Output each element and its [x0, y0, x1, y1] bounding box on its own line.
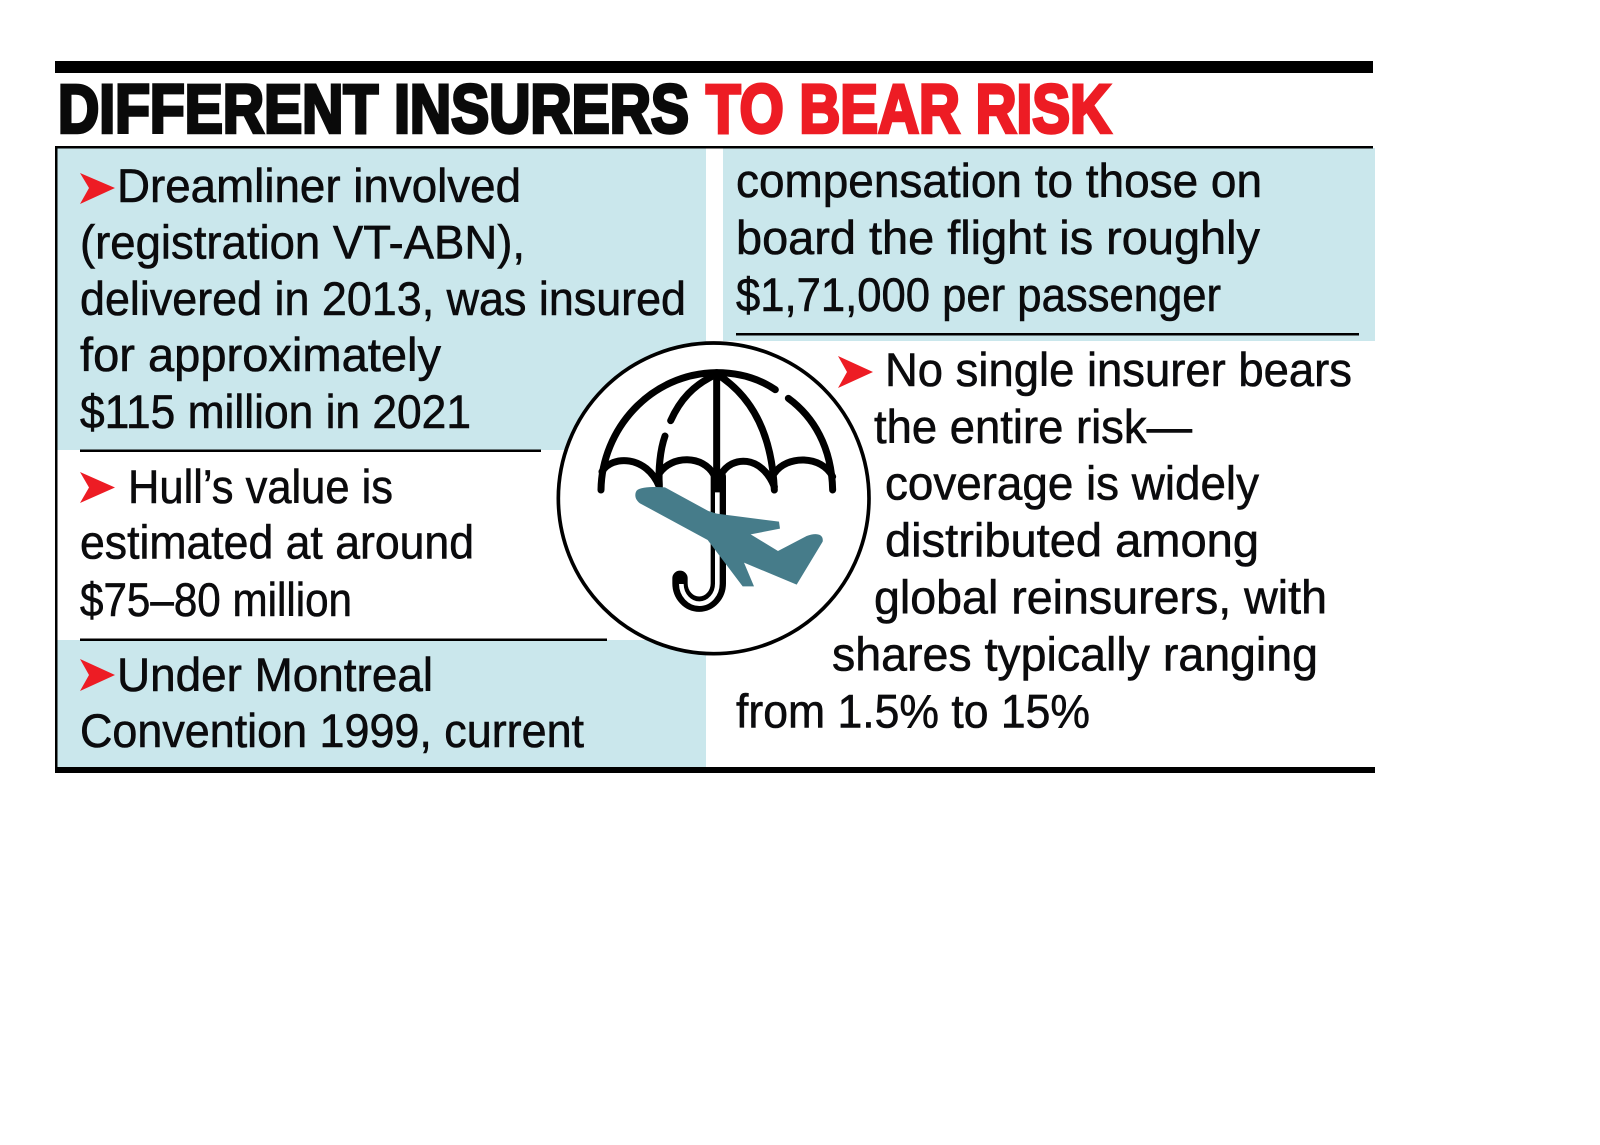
background: montreal block	[57, 640, 706, 768]
text block: dreamliner insured value: $115 million in 2021	[80, 386, 471, 439]
text block: montreal convention: Under Montreal	[117, 649, 433, 702]
title: TO BEAR RISK	[706, 70, 1111, 148]
text block: hull value: $75–80 million	[80, 574, 352, 627]
icon circle	[558, 343, 869, 654]
text block: reinsurers share: coverage is widely	[885, 458, 1259, 510]
text block: hull value: Hull’s value is	[128, 461, 393, 514]
text block: dreamliner insured value: (registration VT-ABN),	[80, 216, 525, 270]
text block: compensation per passenger	[736, 155, 1262, 322]
text block: reinsurers share: from 1.5% to 15%	[736, 686, 1090, 738]
text block: reinsurers share: No single insurer bears	[885, 344, 1352, 397]
text block: compensation per passenger: board the flight is roughly	[736, 212, 1260, 265]
text block: compensation per passenger: $1,71,000 per passenger	[736, 269, 1221, 322]
text block: reinsurers share: shares typically ranging	[832, 628, 1318, 682]
text block: reinsurers share: the entire risk—	[874, 401, 1192, 454]
background: compensation block	[723, 148, 1375, 341]
text block: hull value: estimated at around	[80, 516, 474, 570]
text block: dreamliner insured value	[80, 160, 686, 439]
background: dreamliner block	[57, 148, 706, 450]
text block: reinsurers share	[736, 344, 1352, 738]
text block: reinsurers share: global reinsurers, with	[874, 572, 1327, 624]
umbrella	[601, 373, 833, 604]
icon: umbrella and plane	[558, 343, 869, 654]
panel: right column	[723, 148, 1375, 738]
panel: left column	[57, 148, 706, 768]
plane	[635, 487, 823, 586]
frame: rules	[55, 146, 1375, 773]
text block: montreal convention: Convention 1999, current	[80, 705, 584, 758]
text block: dreamliner insured value: delivered in 2013, was insured	[80, 273, 686, 326]
text block: hull value	[80, 461, 474, 627]
text block: dreamliner insured value: Dreamliner involved	[117, 160, 521, 213]
text block: reinsurers share: distributed among	[885, 514, 1259, 568]
top rule	[55, 61, 1373, 73]
title: DIFFERENT INSURERS	[58, 70, 689, 148]
text block: compensation per passenger: compensation to those on	[736, 155, 1262, 208]
text block: montreal convention	[80, 649, 584, 758]
text block: dreamliner insured value: for approximately	[80, 329, 441, 382]
